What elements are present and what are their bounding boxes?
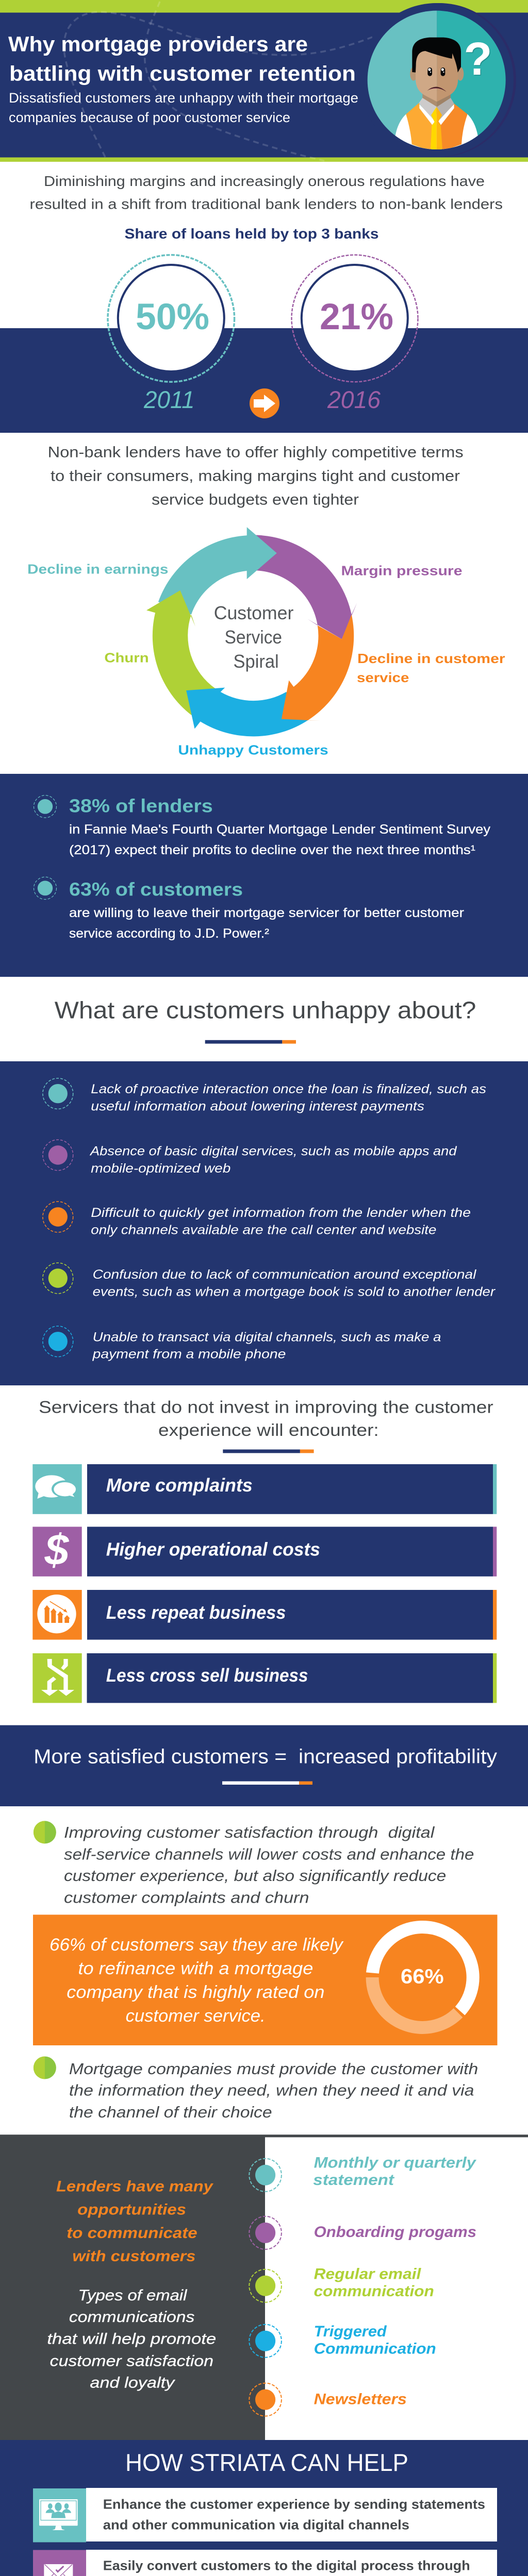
list item: difficult to get information [43,1201,471,1237]
list item: unable to transact digitally: Unable to transact via digital channels, such as make a [93,1330,441,1345]
chart: customer service spiral [27,527,505,757]
item: regular email communication: communication [314,2283,434,2300]
row: less repeat business: Less repeat business [106,1602,286,1623]
chart: 66% donut [372,1927,473,2027]
title [8,32,356,86]
subtitle: companies because of poor customer service [9,110,290,125]
stat: 38% of lenders [34,795,491,857]
list item: absence of digital services: Absence of basic digital services, such as mobile apps and [89,1144,457,1159]
chart: 2016 share circle: 2016 [327,386,381,413]
icon: speech bubbles [35,1475,77,1499]
icon: dollar sign: $ [44,1526,70,1574]
panel: satisfied customers heading: More satisfied customers = increased profitability [34,1745,498,1768]
list item: lack of proactive interaction: useful information about lowering interest payments [91,1099,424,1113]
text block: types of email communications: customer satisfaction [50,2352,213,2369]
text block: lenders have many opportunities: to communicate [67,2225,197,2242]
chart: 2011 share circle [108,255,235,413]
text block: improving satisfaction [34,1821,474,1906]
text block: non-bank lenders: to their consumers, making margins tight and customer [51,467,460,484]
icon: green bullet [34,2057,56,2079]
label: decline in customer service: service [357,670,409,685]
text block: lenders have many opportunities: opportunities [77,2201,186,2218]
stat: 63% of customers [34,877,464,941]
label: spiral centre [214,602,293,672]
text block: improving satisfaction: self-service channels will lower costs and enhance the [64,1845,474,1863]
icon: question mark: ? [464,33,492,85]
label: unhappy customers: Unhappy Customers [178,742,328,757]
stat: 63% of customers: 63% of customers [69,879,243,900]
heading: servicers that do not invest [39,1397,493,1453]
row: more complaints [32,1464,497,1514]
text block: mortgage companies must provide: the channel of their choice [69,2103,272,2121]
item: regular email communication: Regular email [314,2265,421,2282]
list item: absence of digital services: mobile-optimized web [91,1161,230,1176]
label: decline in customer service: Decline in customer [357,651,505,666]
label: churn: Churn [104,650,149,665]
heading: servicers that do not invest: experience will encounter: [158,1420,379,1439]
card: convert customers to digital: Easily convert customers to the digital process through [103,2557,470,2573]
list item: difficult to get information: only channels available are the call center and website [91,1223,436,1237]
stat: 38% of lenders: in Fannie Mae's Fourth Quarter Mortgage Lender Sentiment Survey [69,822,491,837]
arrows: spiral segments [146,527,357,736]
item: regular email communication [249,2265,434,2302]
item: onboarding programs: Onboarding progams [314,2224,476,2241]
item: triggered communication [249,2323,436,2358]
text block: improving satisfaction: customer complaints and churn [64,1889,309,1906]
item: monthly or quarterly statement [249,2155,476,2192]
label: spiral centre: Customer [214,602,293,623]
panel: customer complaints list [0,1061,528,1385]
card: enhance the customer experience: and other communication via digital channels [103,2517,409,2532]
list item: unable to transact digitally: payment from a mobile phone [92,1347,286,1361]
panel: header banner [0,0,528,162]
text block: lenders have many opportunities: with customers [72,2248,195,2265]
row: less cross sell business [32,1653,497,1703]
row: less cross sell business: Less cross sell business [106,1665,308,1686]
label: margin pressure: Margin pressure [341,563,462,578]
title: Why mortgage providers are [8,32,308,56]
text block: types of email communications: Types of email [78,2287,188,2304]
label: spiral centre: Spiral [233,651,279,672]
list item: absence of digital services [43,1140,457,1176]
text block: types of email communications [47,2287,216,2392]
label: spiral centre: Service [225,626,282,648]
text block: lenders have many opportunities: Lenders have many [56,2178,213,2195]
panel: navy band behind circles [0,328,528,433]
list item: lack of proactive interaction [43,1078,486,1113]
list item: lack of proactive interaction: Lack of proactive interaction once the loan is finalized, such as [91,1082,486,1096]
text block: improving satisfaction: Improving customer satisfaction through digital [64,1823,435,1841]
text block: non-bank lenders [48,444,464,509]
text block: non-bank lenders: service budgets even tighter [152,492,359,509]
card: convert customers to digital [33,2550,497,2576]
subtitle [9,90,358,125]
chart: 2016 share circle: 21% [320,297,393,337]
callout text: 66% of customers say they are likely [50,1935,344,1955]
chart: 2011 share circle: 50% [136,297,209,337]
list item: difficult to get information: Difficult to quickly get information from the lender when the [91,1206,471,1220]
item: monthly or quarterly statement: Monthly or quarterly [314,2155,476,2172]
card: enhance the customer experience: Enhance the customer experience by sending statements [103,2497,485,2512]
text block: shift to non-bank lenders [30,173,503,212]
label: decline in earnings: Decline in earnings [27,562,168,577]
row: higher operational costs [32,1526,497,1577]
text block: shift to non-bank lenders: Diminishing margins and increasingly onerous regulations have [44,173,485,189]
row: higher operational costs: Higher operational costs [106,1539,320,1560]
text block: lenders have many opportunities [56,2178,213,2265]
text block: non-bank lenders: Non-bank lenders have to offer highly competitive terms [48,444,464,461]
heading: what are customers unhappy about: What are customers unhappy about? [55,996,476,1023]
item: onboarding programs [249,2216,476,2249]
stat: 63% of customers: service according to J.D. Power.² [69,926,269,941]
text block: mortgage companies must provide: Mortgage companies must provide the customer with [69,2060,478,2078]
stat: 38% of lenders: 38% of lenders [69,795,213,817]
icon: crossing arrows [41,1659,74,1696]
icon: question mark: ? [465,34,493,86]
stat: 63% of customers: are willing to leave their mortgage servicer for better customer [69,906,464,920]
icon: green bullet [34,1821,56,1843]
icon: worried customer portrait [359,3,516,157]
arrow: 2011 to 2016 [250,388,279,418]
icon: envelope with cursor [44,2564,80,2576]
list item: confusion over exceptional events: events, such as when a mortgage book is sold to another lender [93,1284,496,1299]
icon: declining chart [37,1595,76,1633]
heading: what are customers unhappy about [55,996,476,1044]
subtitle: Dissatisfied customers are unhappy with their mortgage [9,90,358,106]
text block: shift to non-bank lenders: resulted in a shift from traditional bank lenders to non-bank lenders [30,196,503,212]
text block: types of email communications: and loyalty [90,2375,176,2392]
callout text: to refinance with a mortgage [78,1959,313,1978]
title: battling with customer retention [9,62,356,86]
panel: statistics [0,774,528,977]
panel: satisfied customers heading [0,1725,528,1806]
chart: 2011 share circle: 2011 [143,386,195,413]
item: newsletters: Newsletters [314,2391,407,2408]
stat: 38% of lenders: (2017) expect their profits to decline over the next three months¹ [69,843,475,857]
row: less repeat business [32,1590,497,1640]
label: decline in customer service [357,651,505,685]
item: monthly or quarterly statement: statement [313,2172,395,2189]
callout text: customer service. [126,2006,266,2026]
list item: confusion over exceptional events [43,1263,496,1299]
item: triggered communication: Triggered [314,2323,387,2340]
text block: improving satisfaction: customer experience, but also significantly reduce [64,1867,446,1885]
chart: 2016 share circle [292,255,418,413]
heading: share of loans: Share of loans held by top 3 banks [125,226,378,242]
row: more complaints: More complaints [106,1475,253,1496]
chart: 66% donut: 66% [401,1965,444,1988]
heading: how Striata can help: HOW STRIATA CAN HELP [125,2449,408,2476]
panel: 66% callout [33,1914,497,2045]
panel: how Striata can help [0,2440,528,2576]
callout text [50,1935,344,2026]
heading: servicers that do not invest: Servicers that do not invest in improving the customer [39,1397,493,1416]
text block: types of email communications: that will help promote [47,2331,216,2348]
item: newsletters [249,2383,407,2416]
list item: unable to transact digitally [43,1326,441,1361]
icon: monitor with people [39,2499,78,2530]
text block: mortgage companies must provide [34,2057,478,2121]
text block: types of email communications: communications [69,2309,194,2326]
item: triggered communication: Communication [314,2340,436,2358]
text block: mortgage companies must provide: the information they need, when they need it and via [69,2081,474,2099]
list item: confusion over exceptional events: Confusion due to lack of communication around exceptional [93,1267,477,1282]
callout text: company that is highly rated on [67,1982,325,2002]
panel: email communication types [0,2134,528,2440]
card: enhance the customer experience [33,2488,497,2542]
